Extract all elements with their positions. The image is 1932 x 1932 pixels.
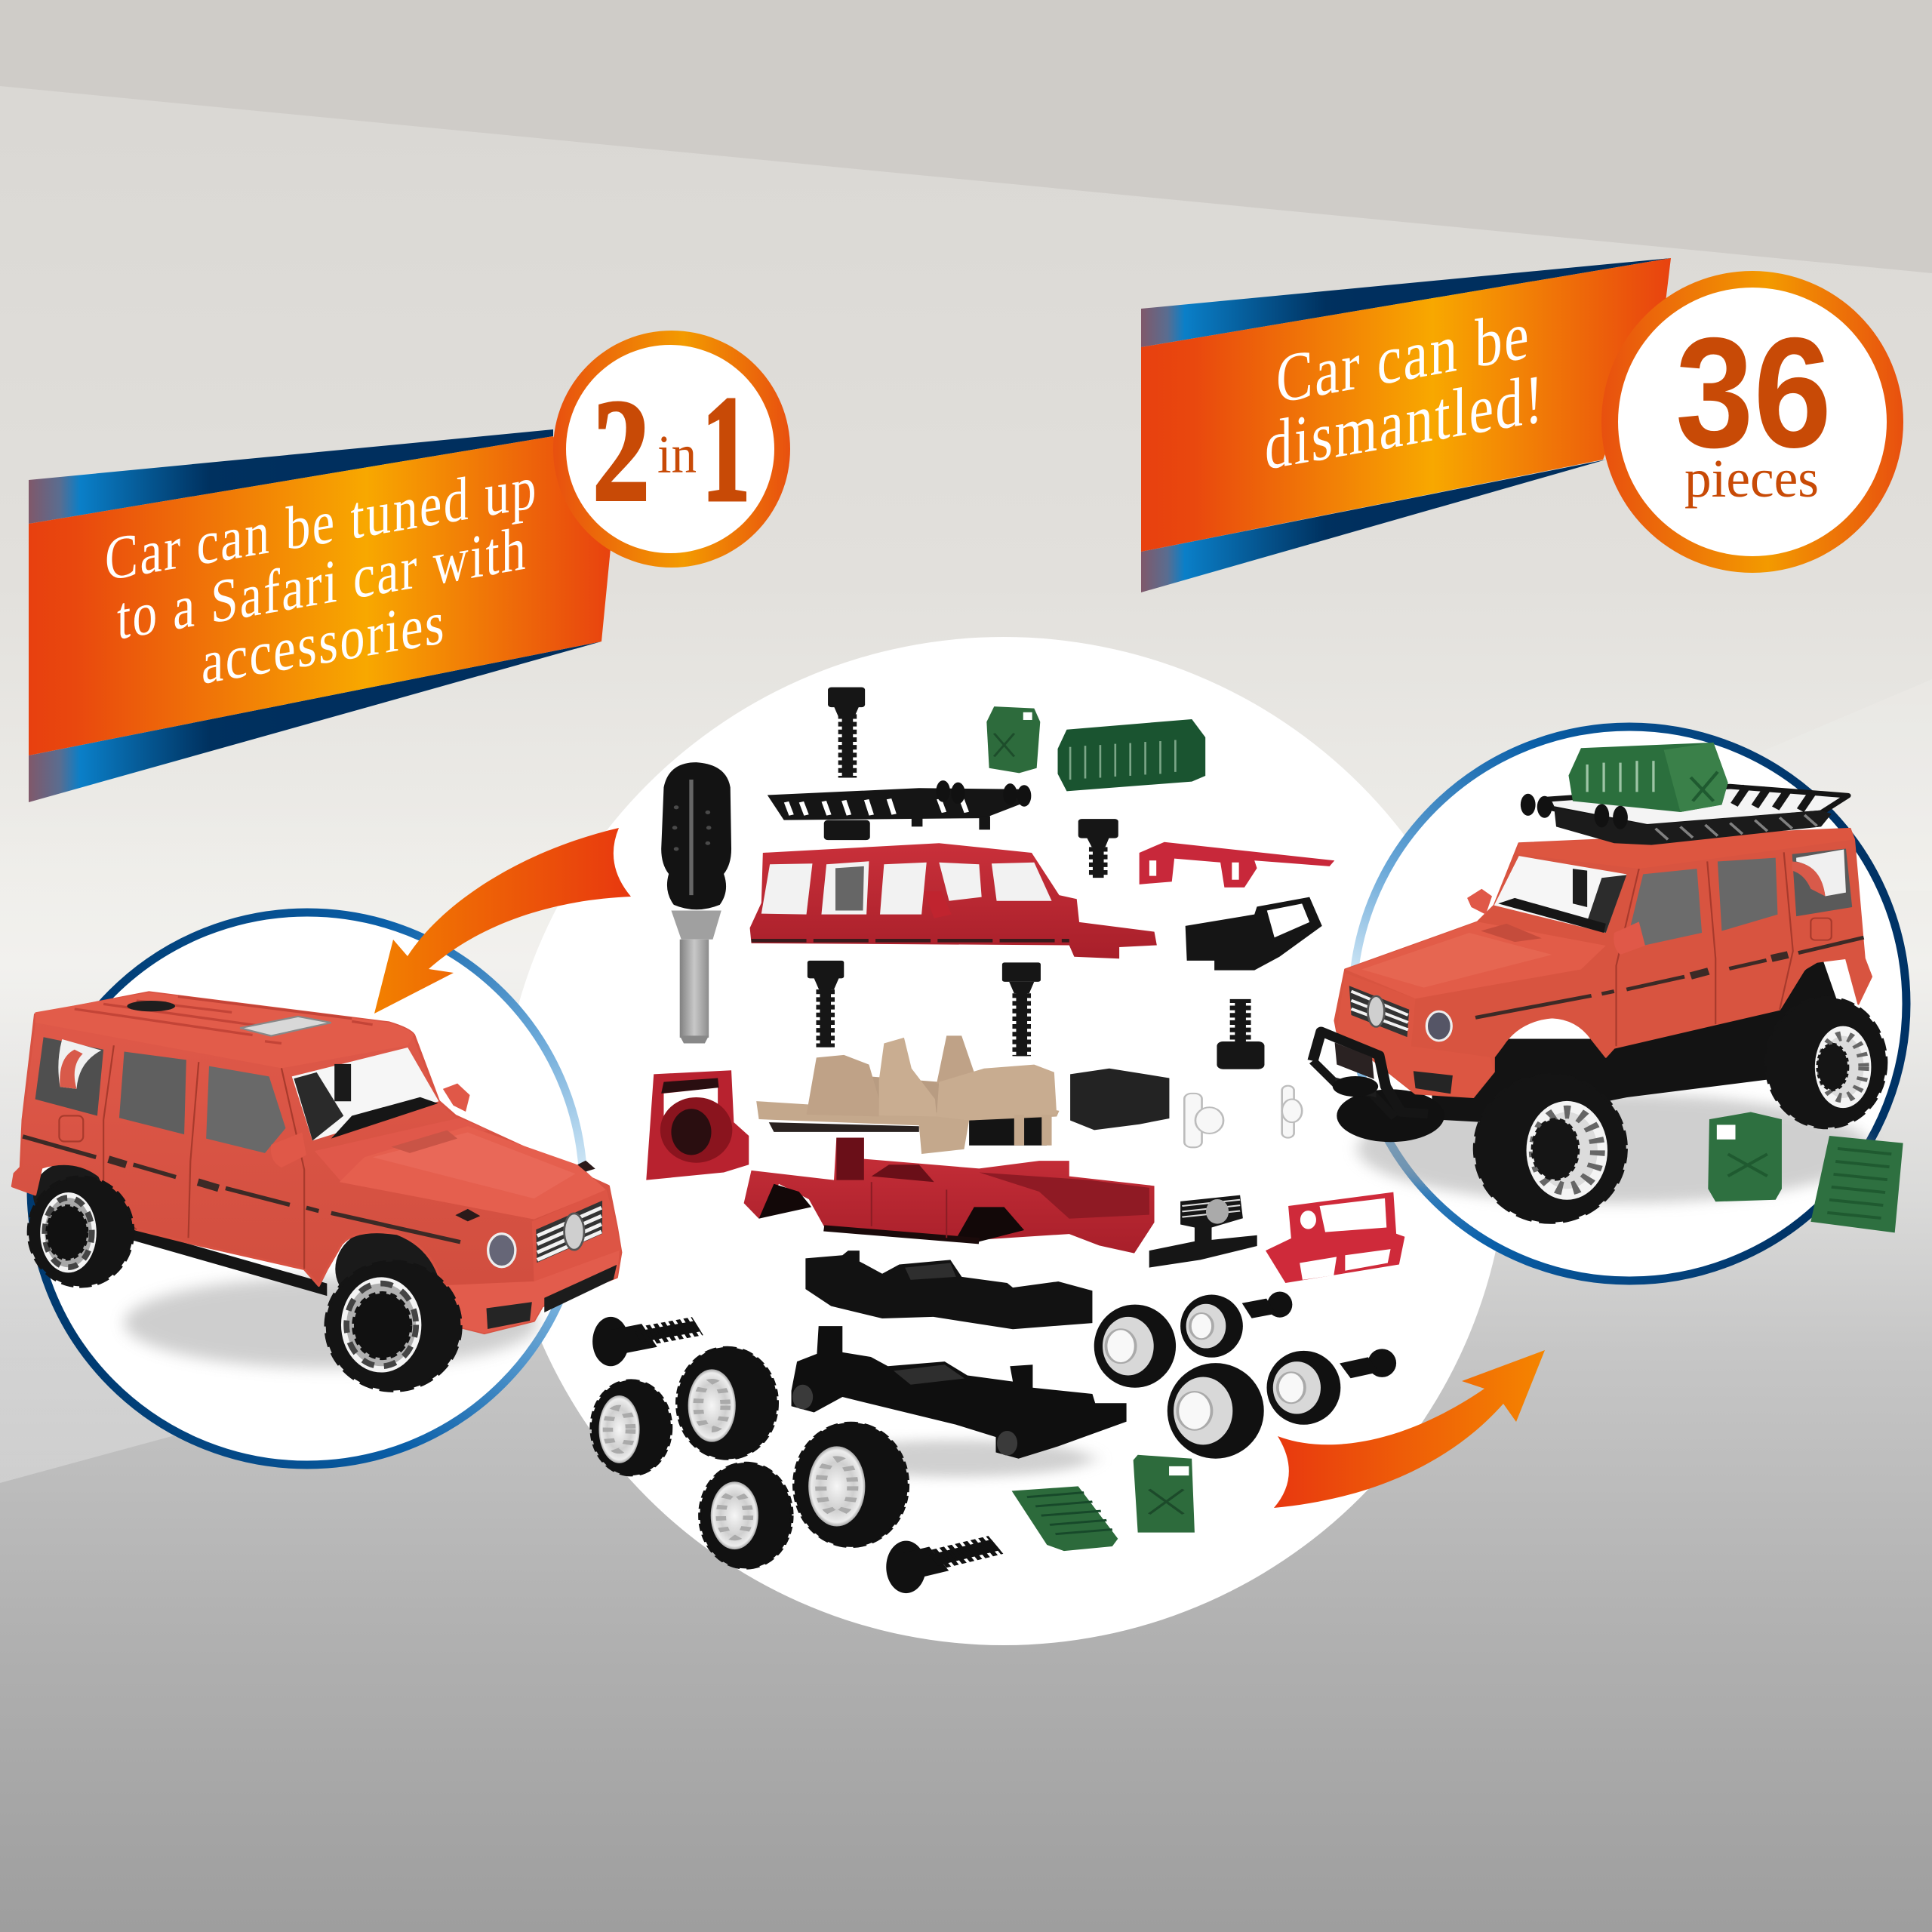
car door lines [59,1045,304,1269]
bolt bottom [886,1541,996,1593]
roof rack part [768,780,1031,840]
safari roof [1517,829,1854,869]
clear part 1 [1184,1094,1223,1147]
banner: left ribbon [29,429,611,802]
car roof [35,992,414,1068]
seats part [756,1035,1060,1154]
badge: 36 pieces [1601,271,1903,573]
banner text line 2: dismantled! [1265,360,1545,485]
safari front face [1337,973,1494,1097]
arrow: parts to stock car [374,828,631,1014]
grille part [1149,1195,1257,1268]
car hood [340,1126,607,1220]
car bumper [438,1251,620,1333]
parts group: lower section [592,1192,1404,1593]
screw top [828,688,865,778]
jerry can [1134,1455,1195,1533]
safari windows [1494,848,1852,946]
wheel arch interiors [33,1161,443,1312]
screw short [1078,819,1118,878]
red bumper part [1266,1192,1404,1283]
safari mirrors [1467,889,1645,955]
black box part [1070,1069,1169,1130]
car mirrors [271,1084,470,1168]
badge number 1: 1 [702,366,750,533]
undercarriage [1432,955,1838,1123]
roof jerry can [1568,743,1728,812]
car trim strips [23,1137,460,1242]
black bull bar part [1186,897,1322,971]
panel: central white circle of parts background [500,637,1508,1645]
banner text line 2: to a Safari car with [117,513,528,653]
red hood part [1140,842,1334,888]
black chassis lower [792,1326,1127,1459]
bolt left [592,1317,697,1366]
screw [1002,962,1041,1056]
roof vent [127,1001,175,1011]
car windows [35,1037,438,1153]
safari body silhouette [1335,829,1872,1097]
loose jerry can [1708,1112,1782,1201]
clear part 2 [1282,1086,1302,1138]
banner: right ribbon [1141,258,1671,592]
rear wheel [29,1177,133,1286]
panel: left car circle [31,912,583,1465]
front wheel [326,1262,460,1391]
badge: 2 in 1 [553,331,790,568]
red chassis part [744,1138,1155,1254]
screw [808,961,844,1048]
badge number 2: 2 [592,369,650,531]
roof rack [1521,743,1848,845]
right wheels [1094,1295,1340,1459]
screw with round head [1217,999,1264,1069]
loose ramp [1810,1136,1903,1232]
car body silhouette [12,992,621,1333]
safari grille [1349,986,1409,1037]
red body shell [750,843,1157,958]
green ramp panel [1058,719,1205,791]
car: safari version with roof rack [1312,743,1903,1232]
rack lights [1521,794,1628,829]
screwdriver [661,762,731,1044]
banner text line 1: Car can be [1276,296,1531,419]
small jerry can [986,706,1040,773]
badge number 36: 36 [1675,306,1832,481]
safari front wheel [1475,1075,1626,1223]
banner text line 1: Car can be tuned up [105,451,538,594]
car sill [125,1226,327,1296]
car hood indicators [455,1161,595,1221]
panel: right car circle [1352,727,1906,1281]
red door part [646,1070,749,1180]
bull bar [1312,1032,1428,1118]
car: red G-class stock version [12,992,621,1391]
green ramp [1012,1486,1118,1551]
banner text line 3: accessories [202,587,446,697]
safari trim strips [1475,937,1864,1017]
small bolt [1247,1291,1292,1318]
black chassis upper [805,1251,1092,1329]
arrow: parts to safari car [1274,1350,1545,1508]
car headlight [488,1234,515,1267]
badge word in: in [657,424,697,485]
car front face [532,1189,621,1284]
badge word pieces: pieces [1684,448,1819,509]
sunroof [240,1017,331,1036]
car cowl [315,1118,488,1182]
parts group: upper section [646,688,1334,1254]
left wheels [592,1347,908,1568]
car grille [536,1201,602,1263]
small bolt [1345,1349,1396,1377]
far front wheel [1337,1089,1444,1142]
safari hood [1345,921,1606,998]
safari headlight [1426,1011,1451,1041]
safari door lines [1617,852,1832,1046]
safari rear wheel [1766,998,1886,1128]
